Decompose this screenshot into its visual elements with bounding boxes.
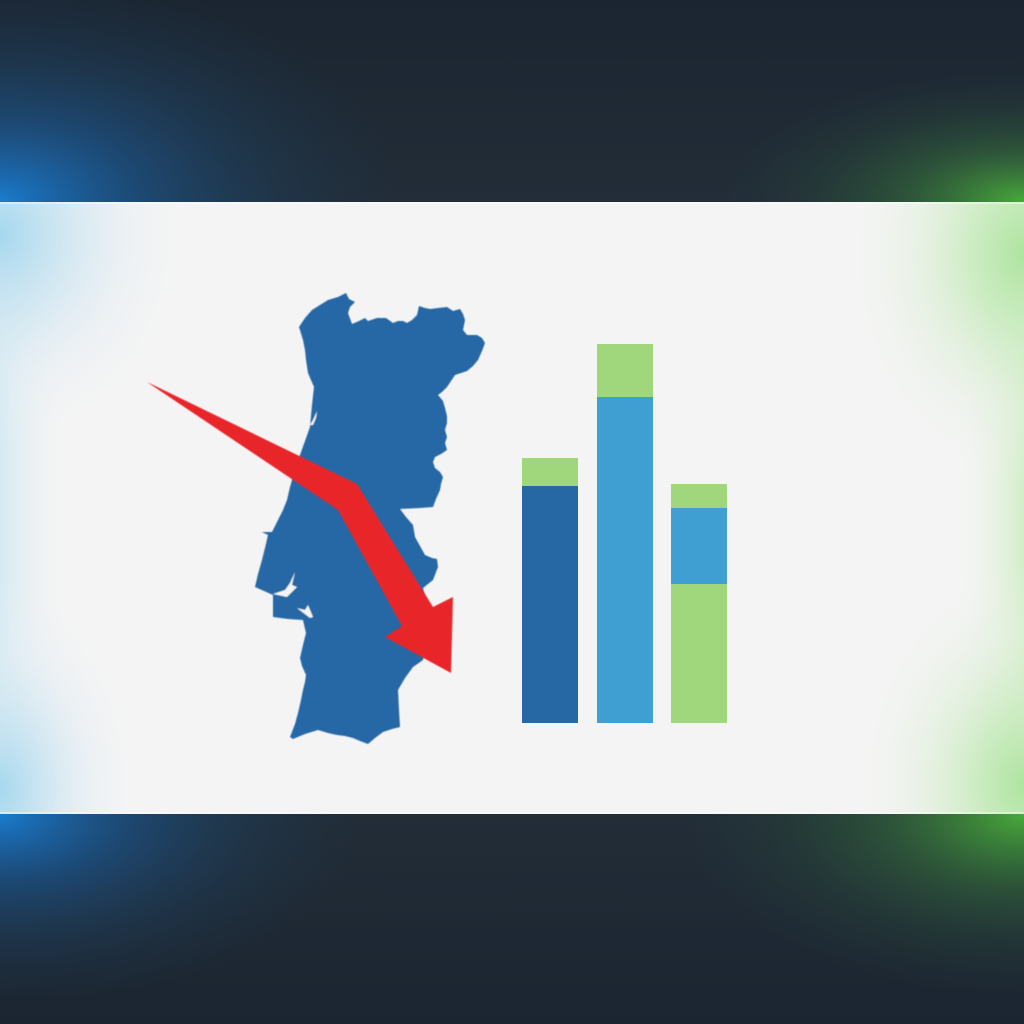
map of Portugal [255, 293, 485, 744]
bar 1 [522, 458, 578, 723]
top dark band with corner glows [0, 21, 1024, 202]
stacked bar chart [522, 344, 727, 723]
bar 3 [671, 484, 727, 723]
map inlet: Aveiro lagoon [310, 411, 317, 425]
bottom dark band with corner glows [0, 814, 1024, 966]
red downward arrow [147, 382, 453, 673]
map inlet: Sado estuary [297, 605, 313, 618]
white central panel with edge glows [0, 202, 1024, 814]
map inlet: Tejo estuary [273, 572, 297, 597]
bar 2 [597, 344, 653, 723]
